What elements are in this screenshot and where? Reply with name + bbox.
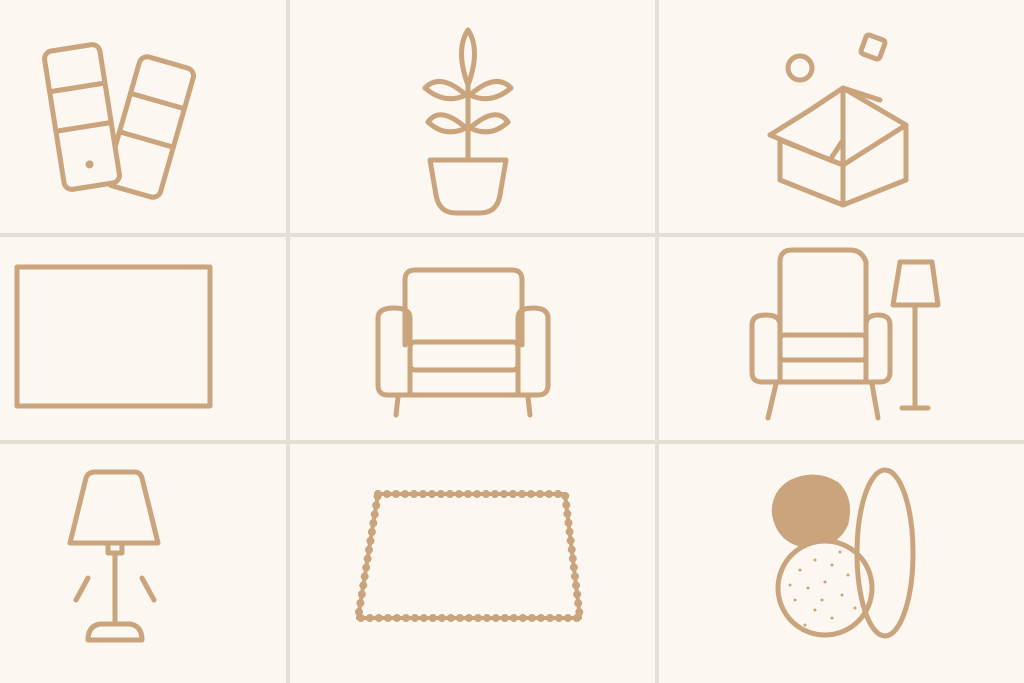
icon: paint swatches (43, 43, 195, 199)
icon: armchair with floor lamp (752, 250, 938, 418)
icon: table lamp (70, 472, 158, 640)
icon: decorative circles (772, 470, 913, 636)
icon: open box (770, 34, 906, 205)
icon: picture frame (17, 267, 210, 406)
icon: armchair (378, 270, 548, 415)
icon: potted plant (425, 30, 511, 213)
icon: shaggy rug (358, 494, 580, 618)
